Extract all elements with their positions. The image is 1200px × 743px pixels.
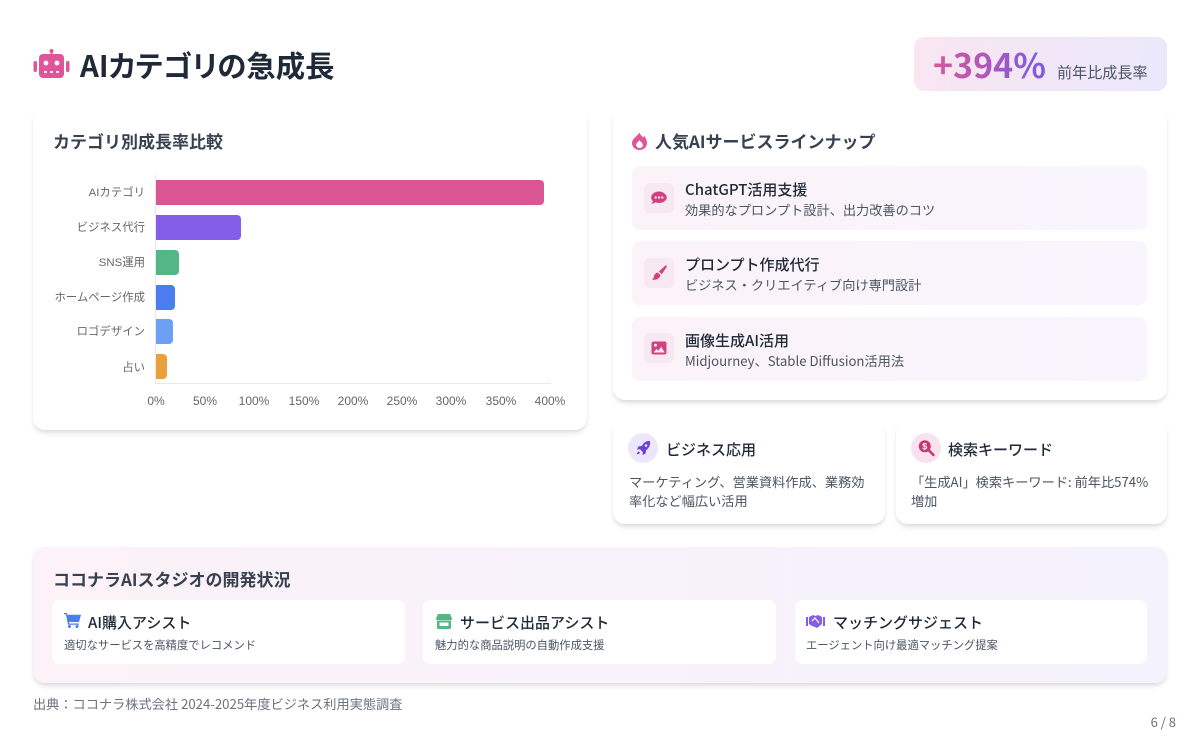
text: 0% [147, 394, 165, 408]
source note: 出典：ココナラ株式会社 2024-2025年度ビジネス利用実態調査 [33, 694, 402, 713]
card text: マーケティング、営業資料作成、業務効 [629, 472, 864, 491]
icon: handshake [806, 615, 825, 628]
card text: 「生成AI」検索キーワード: 前年比574% [911, 472, 1148, 491]
service title: ChatGPT活用支援 [685, 178, 807, 200]
icon: robot [34, 49, 70, 78]
panel: popular AI services [613, 108, 1167, 400]
growth value: +394% [933, 39, 1046, 88]
card: business use [613, 420, 885, 524]
chart heading: カテゴリ別成長率比較 [53, 128, 223, 153]
card text: 率化など幅広い活用 [629, 491, 748, 510]
service description: Midjourney、Stable Diffusion活用法 [685, 351, 904, 370]
text: 50% [193, 394, 217, 408]
service: image generation [632, 317, 1147, 381]
feature title: AI購入アシスト [88, 612, 191, 633]
growth badge [914, 37, 1167, 91]
icon: store [436, 614, 452, 629]
panel: Coconala AI Studio [33, 547, 1167, 683]
icon box: image [644, 333, 674, 363]
service description: 効果的なプロンプト設計、出力改善のコツ [685, 200, 935, 219]
icon: search dollar: $ [922, 442, 927, 452]
feature title: マッチングサジェスト [833, 612, 983, 633]
service title: 画像生成AI活用 [685, 330, 789, 350]
card title: ビジネス応用 [666, 439, 756, 460]
text: ロゴデザイン [77, 326, 145, 338]
icon: rocket [628, 433, 658, 463]
page number: 6 / 8 [1151, 712, 1176, 731]
card text [911, 472, 1148, 510]
services heading: 人気AIサービスラインナップ [655, 128, 876, 153]
growth label: 前年比成長率 [1057, 61, 1148, 83]
text: AIカテゴリ [89, 187, 145, 199]
feature title: サービス出品アシスト [460, 612, 609, 633]
text: SNS運用 [99, 257, 145, 269]
feature: matching suggest [795, 600, 1147, 664]
panel: category growth chart [33, 108, 587, 430]
studio heading: ココナラAIスタジオの開発状況 [53, 566, 291, 591]
icon: flame [632, 132, 647, 150]
service title: プロンプト作成代行 [685, 254, 820, 274]
feature description: 魅力的な商品説明の自動作成支援 [435, 637, 604, 653]
text: 100% [239, 394, 269, 408]
text: 150% [289, 394, 319, 408]
text: 200% [338, 394, 368, 408]
text: ビジネス代行 [77, 222, 145, 234]
text: ホームページ作成 [54, 292, 145, 304]
text: 300% [436, 394, 466, 408]
text: 400% [535, 394, 565, 408]
title: AIカテゴリの急成長 [80, 44, 334, 86]
card: search keyword [896, 420, 1167, 524]
card title: 検索キーワード [948, 439, 1053, 460]
feature description: 適切なサービスを高精度でレコメンド [64, 637, 256, 653]
text: 350% [486, 394, 516, 408]
card text: 増加 [911, 491, 937, 510]
icon box: brush [644, 258, 674, 288]
text: 占い [122, 362, 145, 374]
icon: search dollar [911, 433, 941, 463]
service: ChatGPT [632, 166, 1147, 230]
card text [629, 472, 864, 510]
icon box: chat [644, 183, 674, 213]
feature: AI purchase assist [52, 600, 405, 664]
feature: listing assist [423, 600, 776, 664]
bar chart [155, 175, 551, 384]
icon: cart [64, 613, 81, 628]
feature description: エージェント向け最適マッチング提案 [806, 637, 998, 653]
service: prompt writing [632, 241, 1147, 305]
text: 250% [387, 394, 417, 408]
service description: ビジネス・クリエイティブ向け専門設計 [685, 275, 921, 294]
